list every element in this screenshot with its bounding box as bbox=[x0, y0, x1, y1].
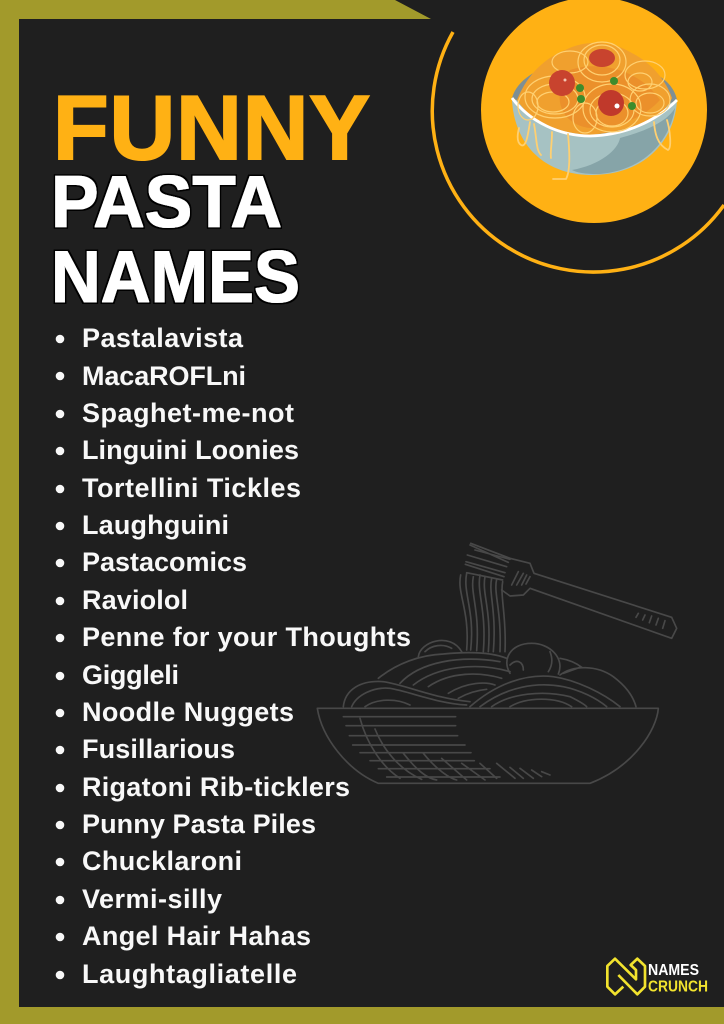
list item: Linguini Loonies: Linguini Loonies bbox=[82, 435, 299, 465]
list item: MacaROFLni: MacaROFLni bbox=[82, 361, 246, 391]
noodle mound bbox=[378, 653, 510, 698]
bowl body bbox=[512, 100, 677, 175]
list item: Tortellini Tickles: Tortellini Tickles bbox=[82, 473, 301, 503]
list item: Noodle Nuggets: Noodle Nuggets bbox=[82, 697, 294, 727]
list item: Raviolol: Raviolol bbox=[82, 585, 188, 615]
logo: Names Crunch bbox=[607, 959, 708, 996]
logo: Names Crunch: NAMES bbox=[648, 962, 699, 979]
pasta mass bbox=[517, 43, 672, 135]
list item: Angel Hair Hahas: Angel Hair Hahas bbox=[82, 921, 311, 951]
list item: Pastacomics: Pastacomics bbox=[82, 547, 247, 577]
fork bbox=[465, 543, 677, 638]
list item: Fusillarious: Fusillarious bbox=[82, 734, 235, 764]
list item: Giggleli: Giggleli bbox=[82, 660, 179, 690]
list item: Spaghet-me-not: Spaghet-me-not bbox=[82, 398, 294, 428]
title: NAMES bbox=[51, 237, 300, 318]
list item: Vermi-silly: Vermi-silly bbox=[82, 884, 222, 914]
icon: pasta bowl in yellow circle bbox=[481, 0, 707, 223]
bullet list bbox=[56, 323, 411, 989]
title: PASTA bbox=[51, 162, 282, 243]
list item: Laughguini: Laughguini bbox=[82, 510, 229, 540]
decorative ring bbox=[432, 32, 724, 272]
noodles bbox=[518, 42, 670, 133]
bowl bbox=[317, 708, 658, 783]
meatballs bbox=[549, 70, 575, 96]
list item: Punny Pasta Piles: Punny Pasta Piles bbox=[82, 809, 316, 839]
list item: Penne for your Thoughts: Penne for your Thoughts bbox=[82, 622, 411, 652]
logo: Names Crunch: CRUNCH bbox=[648, 978, 708, 996]
list item: Chucklaroni: Chucklaroni bbox=[82, 846, 242, 876]
list item: Rigatoni Rib-ticklers: Rigatoni Rib-ticklers bbox=[82, 772, 350, 802]
rim bbox=[512, 98, 677, 136]
list item: Laughtagliatelle: Laughtagliatelle bbox=[82, 959, 297, 989]
peas bbox=[576, 77, 636, 110]
title: FUNNY bbox=[53, 78, 370, 179]
noodles rising bbox=[460, 573, 505, 652]
meatballs bbox=[418, 640, 560, 674]
watermark: fork and spaghetti bowl bbox=[317, 543, 677, 783]
title bbox=[51, 78, 370, 318]
list item: Pastalavista: Pastalavista bbox=[82, 323, 244, 353]
